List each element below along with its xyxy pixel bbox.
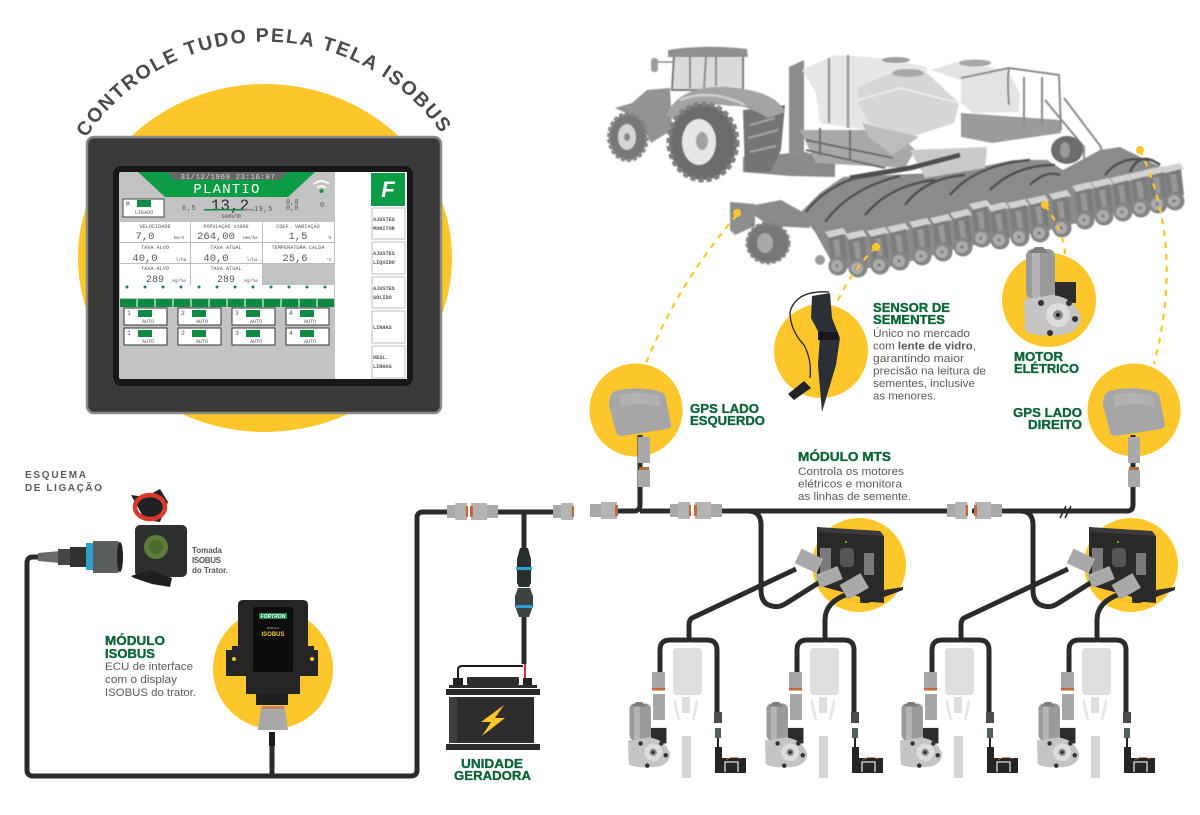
data table: TAXA ALVO: [141, 245, 169, 251]
data table: km/h: [174, 235, 185, 241]
modulo isobus text: [105, 633, 196, 699]
auto buttons: 1: [127, 310, 131, 317]
ECU isobus module: MÓDULO: [267, 625, 280, 630]
auto buttons: 1: [127, 330, 131, 337]
sensor de sementes text: garantindo maior: [873, 353, 964, 365]
motor eletrico label: MOTOR: [1014, 349, 1064, 364]
tractor: [609, 47, 835, 180]
seed rate readout: 13,2: [211, 197, 249, 215]
sensor de sementes text: com lente de vidro ,: [873, 340, 976, 352]
motor eletrico label: [1014, 349, 1079, 376]
seed rate readout: 0,0: [286, 199, 299, 207]
sensor de sementes text: SENSOR DE: [873, 300, 950, 315]
unidade geradora label: GERADORA: [454, 768, 532, 783]
MTS module 2: [1084, 518, 1178, 612]
frame and tanks: [789, 55, 1101, 187]
sensor de sementes text: [873, 300, 986, 402]
seed line group 3: [900, 638, 1018, 778]
socket caption: do Trator.: [192, 566, 228, 575]
GPS connectors and cables: [615, 435, 1140, 518]
side menu: AJUSTES: [373, 251, 395, 257]
seed rate readout: sem/m: [221, 213, 241, 220]
row indicators: [120, 286, 334, 307]
icon: wifi: [314, 181, 329, 193]
MTS wiring 2: [961, 511, 1141, 640]
MTS bus: [590, 502, 1002, 519]
sensor de sementes text: Único no mercado: [873, 327, 970, 340]
data table: 289: [217, 275, 235, 286]
modulo MTS text: MÓDULO MTS: [798, 449, 891, 464]
header banner: PLANTIO: [193, 182, 261, 198]
sensor de sementes text: as menores.: [873, 390, 936, 402]
GPS direito label: DIREITO: [1028, 417, 1082, 432]
motor eletrico icon: [1002, 247, 1096, 347]
side menu: DESL.: [373, 355, 389, 361]
data table: TEMPERATURA CALDA: [272, 245, 325, 251]
data table: TAXA ATUAL: [210, 245, 242, 251]
tractor socket: [131, 489, 187, 587]
auto buttons: AUTO: [196, 319, 208, 325]
status box: ligado: M: [126, 201, 130, 208]
esquema de ligacao heading: [25, 470, 102, 494]
ECU isobus module: ISOBUS: [261, 632, 285, 638]
status box: ligado: LIGADO: [135, 210, 153, 216]
modulo MTS text: [798, 449, 911, 503]
unidade geradora label: UNIDADE: [461, 756, 523, 771]
data table: 1,5: [289, 231, 307, 243]
data table: POPULAÇÃO x1000: [203, 223, 249, 230]
data table: [120, 222, 335, 298]
data table: sem/ha: [242, 236, 258, 241]
ISOBUS monitor: [87, 137, 441, 413]
data table: 25,6: [282, 253, 308, 265]
MTS module 1: [812, 518, 906, 612]
data table: kg/ha: [172, 278, 186, 284]
icon: lightning bolt: [481, 705, 505, 736]
side menu: MONITOR: [373, 226, 396, 232]
monitor inner frame: [113, 166, 413, 386]
auto buttons: 2: [181, 310, 185, 317]
motor eletrico label: ELÉTRICO: [1014, 361, 1079, 376]
connectors on left bus: [447, 503, 574, 520]
modulo isobus text: ECU de interface: [105, 661, 193, 673]
data table: 289: [146, 275, 164, 286]
ECU isobus module: FORTRON: [261, 614, 286, 620]
monitor bezel: [87, 137, 441, 413]
side menu: AJUSTES: [373, 286, 395, 292]
socket caption: Tomada: [192, 546, 223, 555]
tractor and planter illustration: [609, 47, 1184, 278]
esquema de ligacao heading: DE LIGAÇÃO: [25, 481, 102, 494]
auto buttons: AUTO: [250, 319, 262, 325]
side menu: LINHAS: [373, 364, 392, 370]
auto buttons: AUTO: [304, 319, 316, 325]
GPS esquerdo label: GPS LADO: [690, 401, 759, 416]
status box: ligado: [123, 199, 164, 217]
data table: 40,0: [203, 253, 229, 265]
seed rate readout: 19,5: [254, 206, 273, 214]
data table: kg/ha: [244, 278, 258, 284]
battery connector: [515, 548, 533, 617]
data table: %: [329, 235, 332, 241]
seed rate readout: 0: [320, 202, 324, 210]
auto buttons: AUTO: [304, 339, 316, 345]
side menu: AJUSTES: [373, 217, 395, 223]
modulo isobus text: MÓDULO: [105, 633, 165, 648]
modulo MTS text: as linhas de semente.: [798, 491, 911, 503]
auto buttons: AUTO: [142, 319, 154, 325]
seed rate readout: 0,0: [286, 205, 299, 213]
row units: [825, 163, 1184, 278]
header banner: [138, 172, 315, 198]
socket caption: [192, 546, 228, 575]
sensor de sementes text: sementes, inclusive: [873, 378, 975, 390]
GPS esquerdo icon: [590, 364, 682, 456]
auto buttons: 4: [289, 310, 293, 317]
side menu: SÓLIDO: [373, 294, 392, 301]
data table: TAXA ATUAL: [210, 266, 242, 272]
isobus plug: [38, 541, 123, 573]
modulo isobus text: ISOBUS: [105, 646, 155, 661]
modulo isobus text: ISOBUS do trator.: [105, 687, 196, 699]
GPS direito icon: [1088, 364, 1180, 456]
side menu: LINHAS: [373, 325, 392, 331]
yellow circle behind monitor: [78, 84, 452, 432]
header banner: 31/12/1969 23:16:07: [180, 174, 276, 182]
data table: TAXA ALVO: [141, 266, 169, 272]
auto buttons: AUTO: [142, 339, 154, 345]
modulo MTS text: elétricos e monitora: [798, 478, 903, 490]
auto buttons: AUTO: [196, 339, 208, 345]
battery: [446, 664, 540, 750]
planter bar and wheel: [730, 147, 1184, 278]
unidade geradora label: [454, 756, 532, 783]
seed line group 4: [1037, 638, 1155, 778]
auto buttons: 2: [181, 330, 185, 337]
modulo MTS text: Controla os motores: [798, 466, 905, 478]
data table: COEF. VARIAÇÃO: [276, 223, 320, 230]
esquema de ligacao heading: ESQUEMA: [25, 470, 86, 481]
GPS direito label: GPS LADO: [1013, 405, 1082, 420]
data table: l/ha: [247, 257, 258, 263]
yellow circle: modulo isobus: [213, 609, 333, 729]
data table: 264,00: [197, 231, 235, 243]
GPS esquerdo label: ESQUERDO: [690, 413, 765, 428]
side menu: LÍQUIDO: [373, 259, 395, 266]
sensor de sementes text: SEMENTES: [873, 312, 945, 327]
auto buttons: AUTO: [250, 339, 262, 345]
data table: l/ha: [176, 257, 187, 263]
sensor de sementes icon: [774, 292, 868, 412]
GPS esquerdo label: [690, 401, 765, 428]
side menu: [371, 173, 405, 378]
data table: VELOCIDADE: [139, 224, 171, 230]
ECU isobus module: [226, 600, 318, 746]
GPS direito label: [1013, 405, 1082, 432]
auto buttons: 3: [235, 310, 239, 317]
MTS wiring 1: [689, 511, 869, 640]
seed line group 1: [628, 638, 746, 778]
isobus cable: [27, 512, 553, 776]
auto buttons: 4: [289, 330, 293, 337]
data table: 40,0: [132, 253, 158, 265]
title: CONTROLE TUDO PELA TELA ISOBUS: [78, 28, 450, 135]
dotted callout lines: [646, 146, 1167, 364]
seed rate readout: 6,5: [182, 205, 196, 213]
screen: [119, 172, 407, 379]
seed rate readout: [182, 197, 324, 220]
auto buttons: [124, 308, 329, 345]
sensor de sementes text: precisão na leitura de: [873, 366, 986, 378]
side menu: F: [381, 177, 395, 202]
data table: 7,0: [136, 231, 154, 243]
modulo isobus text: com o display: [105, 674, 178, 686]
seed line group 2: [765, 638, 883, 778]
auto buttons: 3: [235, 330, 239, 337]
socket caption: ISOBUS: [192, 556, 222, 565]
data table: °C: [326, 257, 332, 263]
